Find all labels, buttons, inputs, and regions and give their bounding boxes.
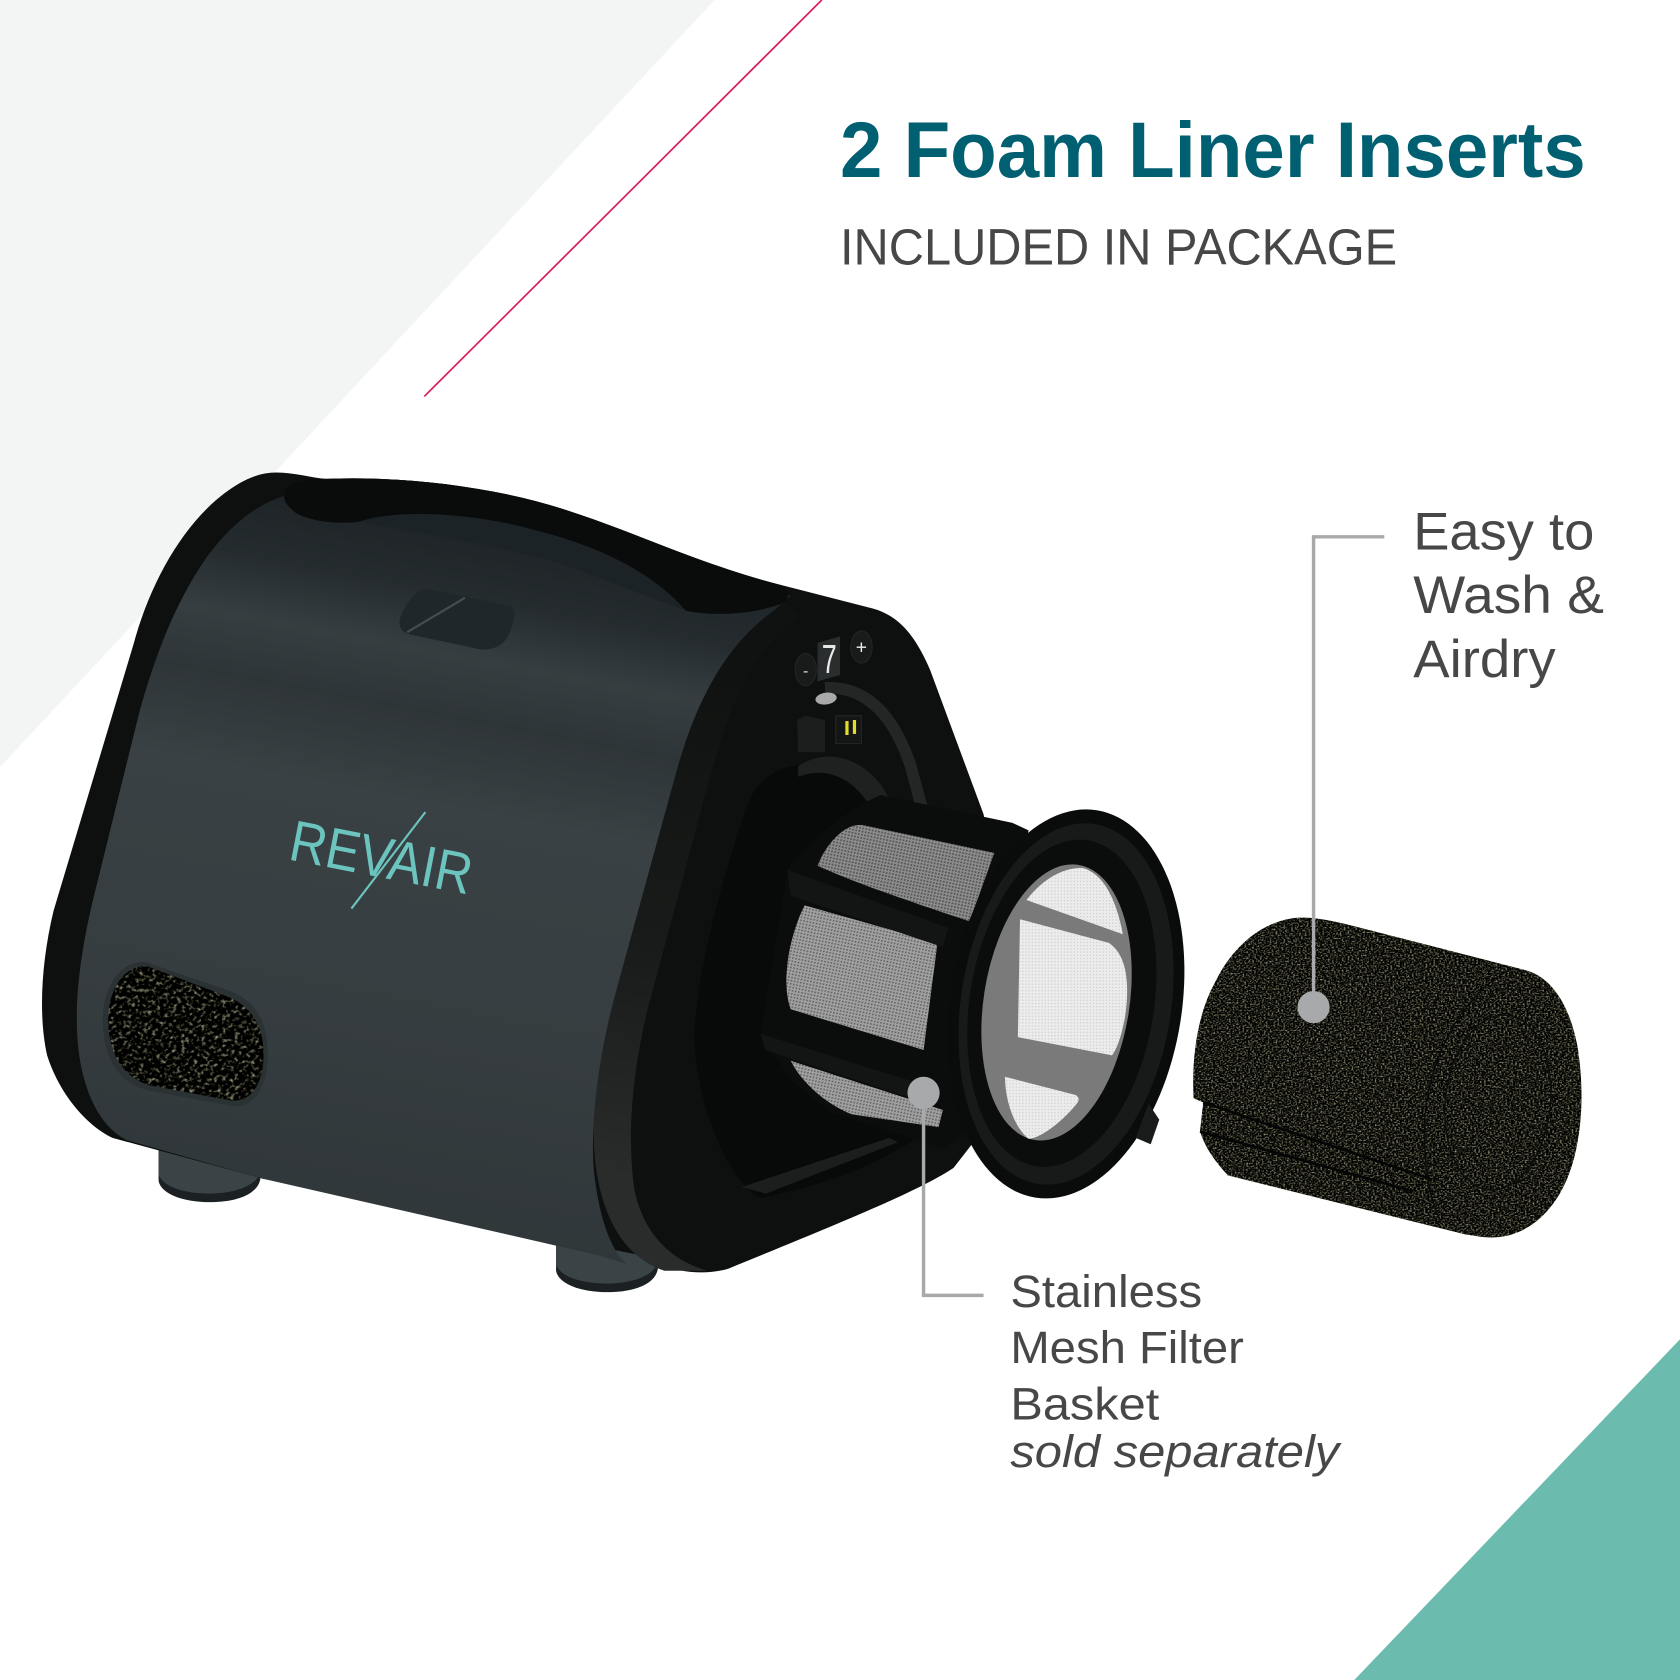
foam seam arc: [1425, 970, 1510, 1221]
basket tab: [1136, 1104, 1159, 1144]
mesh panel: top: [818, 825, 994, 921]
callout: foam: [1298, 503, 1604, 1023]
side panel: [77, 478, 791, 1264]
basket frame back: [761, 795, 1029, 1149]
minus button: -: [803, 662, 808, 680]
control panel: [795, 631, 872, 752]
foam notch lines: [1200, 1102, 1432, 1191]
decor: pink diagonal line: [424, 0, 822, 396]
foam vent: [103, 962, 268, 1106]
filter basket: [761, 792, 1211, 1216]
callout text: stainless mesh: Mesh Filter: [1010, 1322, 1244, 1373]
foam end-face outline: [1436, 1010, 1559, 1195]
top latch: [399, 588, 514, 649]
front recess: [694, 763, 954, 1198]
callout text: easy to wash: [1413, 503, 1604, 689]
callout text: easy to wash: Wash &: [1413, 566, 1604, 625]
subtitle: INCLUDED IN PACKAGE: [840, 218, 1397, 276]
mesh panel: middle: [786, 905, 938, 1050]
inner windows: [1026, 868, 1123, 934]
port collar: [798, 757, 891, 806]
device illustration: [42, 472, 1211, 1292]
foot: rear right: [556, 1232, 658, 1292]
callout text: stainless mesh: [1010, 1266, 1342, 1477]
logo: REVAIR: [285, 809, 478, 907]
callout text: stainless mesh: sold separately: [1010, 1426, 1342, 1477]
front face rim band: [593, 587, 798, 1271]
cable arch: [825, 688, 924, 814]
basket flange: [921, 792, 1211, 1216]
title: 2 Foam Liner Inserts: [840, 105, 1586, 194]
foam liner insert: [1193, 918, 1582, 1238]
plus button: +: [856, 638, 867, 659]
charging port: [797, 716, 861, 752]
decor: teal corner triangle: [1354, 1339, 1680, 1680]
callout: basket: [908, 1077, 1342, 1477]
callout text: stainless mesh: Basket: [1010, 1379, 1160, 1430]
foot: rear left: [159, 1146, 260, 1202]
recess lower slot: [741, 1138, 898, 1194]
callout text: easy to wash: Airdry: [1413, 630, 1556, 689]
indicator light: [815, 691, 838, 706]
callout text: easy to wash: Easy to: [1413, 503, 1594, 562]
decor: light grey triangle: [0, 0, 715, 767]
display: 7: [822, 636, 837, 682]
basket ribs: [761, 870, 948, 1104]
carry handle: [284, 478, 788, 614]
callout text: stainless mesh: Stainless: [1010, 1266, 1202, 1317]
device body silhouette: [42, 472, 1029, 1272]
mesh panel: bottom: [791, 1061, 943, 1127]
